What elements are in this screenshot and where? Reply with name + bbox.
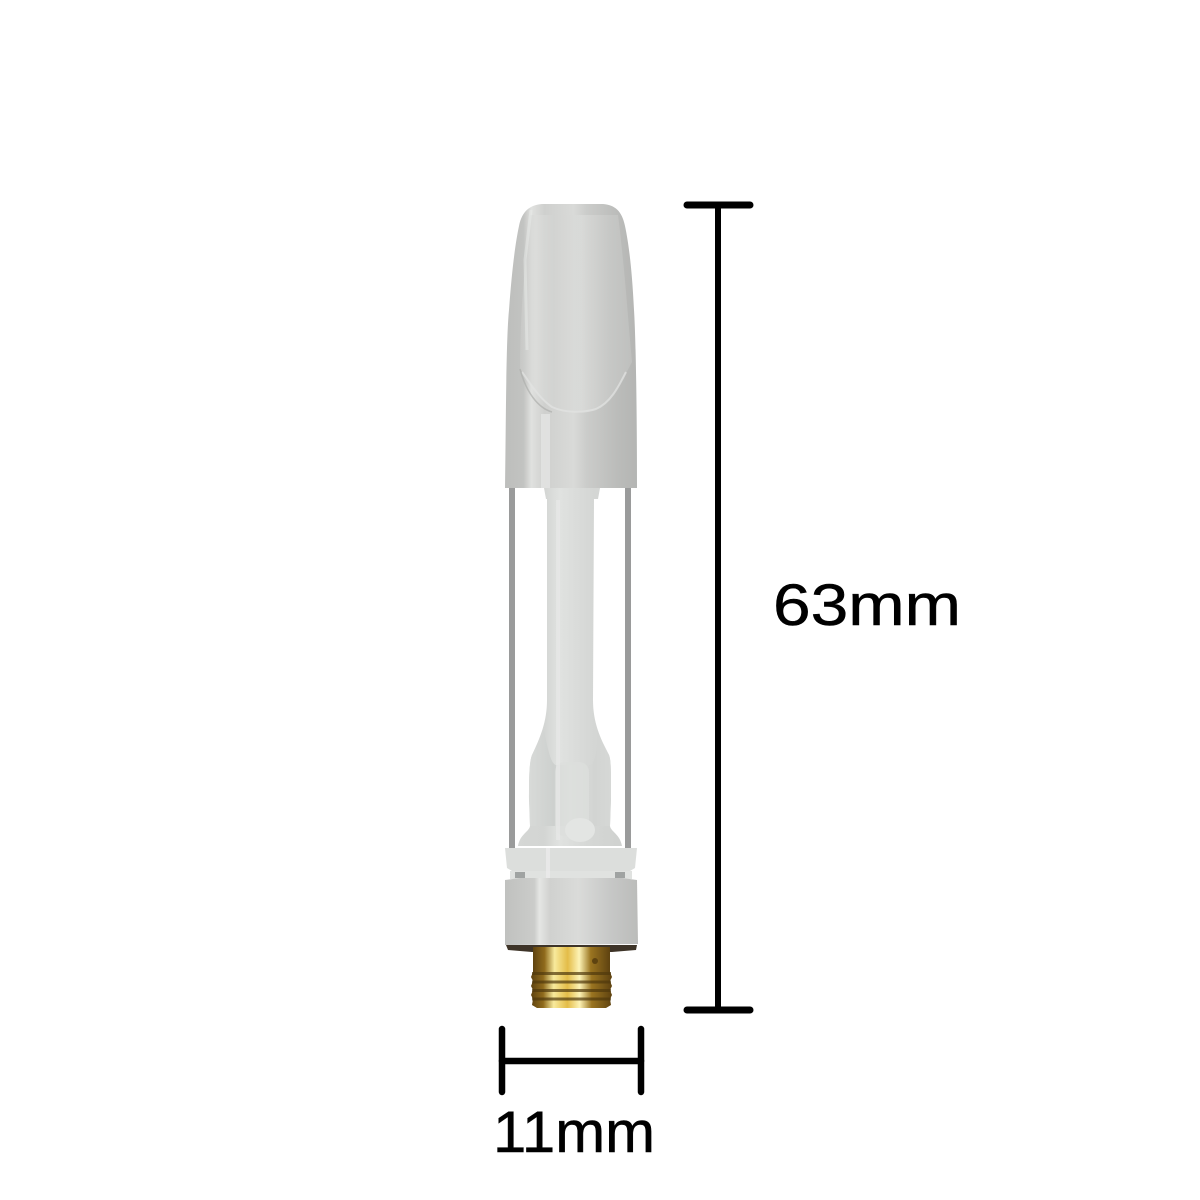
cartridge [505, 204, 638, 1008]
inner stem [518, 488, 622, 846]
width dimension: 11mm [493, 1029, 655, 1165]
label: 11mm: 11mm [493, 1100, 655, 1165]
height bracket [687, 205, 750, 1010]
label: 63mm: 63mm [773, 573, 961, 638]
seal ring [505, 848, 637, 946]
glass tube walls [509, 486, 631, 848]
gold threaded connector [531, 947, 612, 1008]
width bracket [502, 1029, 641, 1092]
base collar [505, 878, 638, 952]
mouthpiece [505, 204, 637, 488]
